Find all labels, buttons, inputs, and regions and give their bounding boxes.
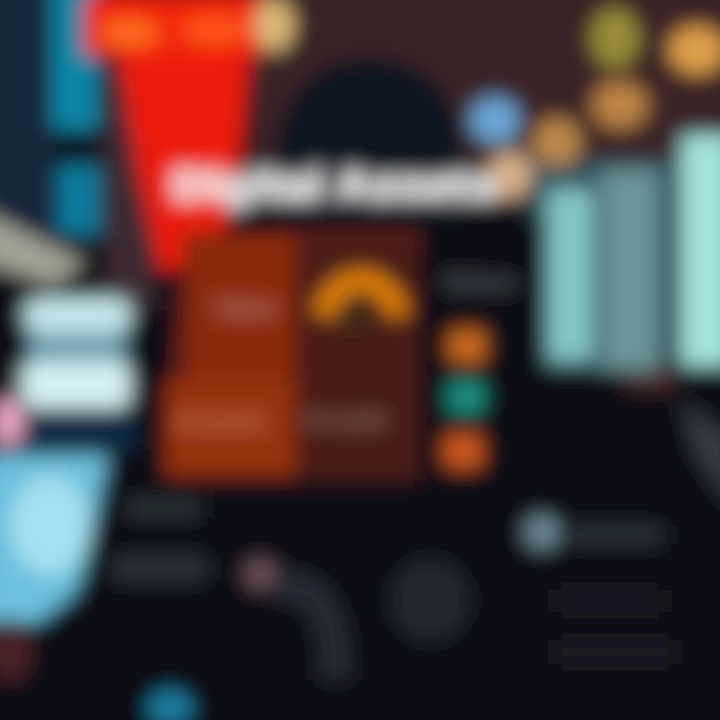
warm lights upper right [488, 8, 720, 199]
pale teal glass panels [548, 135, 720, 370]
chart: circle centre [390, 558, 470, 642]
title: Digital Assets [172, 161, 497, 208]
left white and cyan reflections [0, 210, 135, 682]
sidebar heading: Status [443, 269, 517, 296]
dark dome [275, 58, 465, 220]
icon: blue dot bottom [148, 690, 192, 720]
icon: blue globe [470, 97, 520, 143]
metric text: lower left: Assets [174, 405, 266, 436]
metric text: lower centre: Growth [303, 407, 387, 434]
metric text: top left: Value [214, 295, 276, 322]
panel: lower left summary text [112, 498, 207, 581]
icon: teal square [448, 381, 484, 413]
chart: ring left [244, 558, 335, 680]
panel: lower right list [525, 515, 675, 664]
icon: orange square [449, 330, 485, 362]
grey edge at right [680, 400, 720, 510]
icon: orange-red square [444, 434, 482, 468]
gauge chart [323, 280, 399, 332]
panel: dashboard [165, 220, 545, 485]
dark lower console [25, 480, 720, 720]
red neon sign [85, 0, 294, 270]
cyan vertical neon strip [52, 0, 100, 235]
panel: orange metrics area [165, 232, 420, 480]
